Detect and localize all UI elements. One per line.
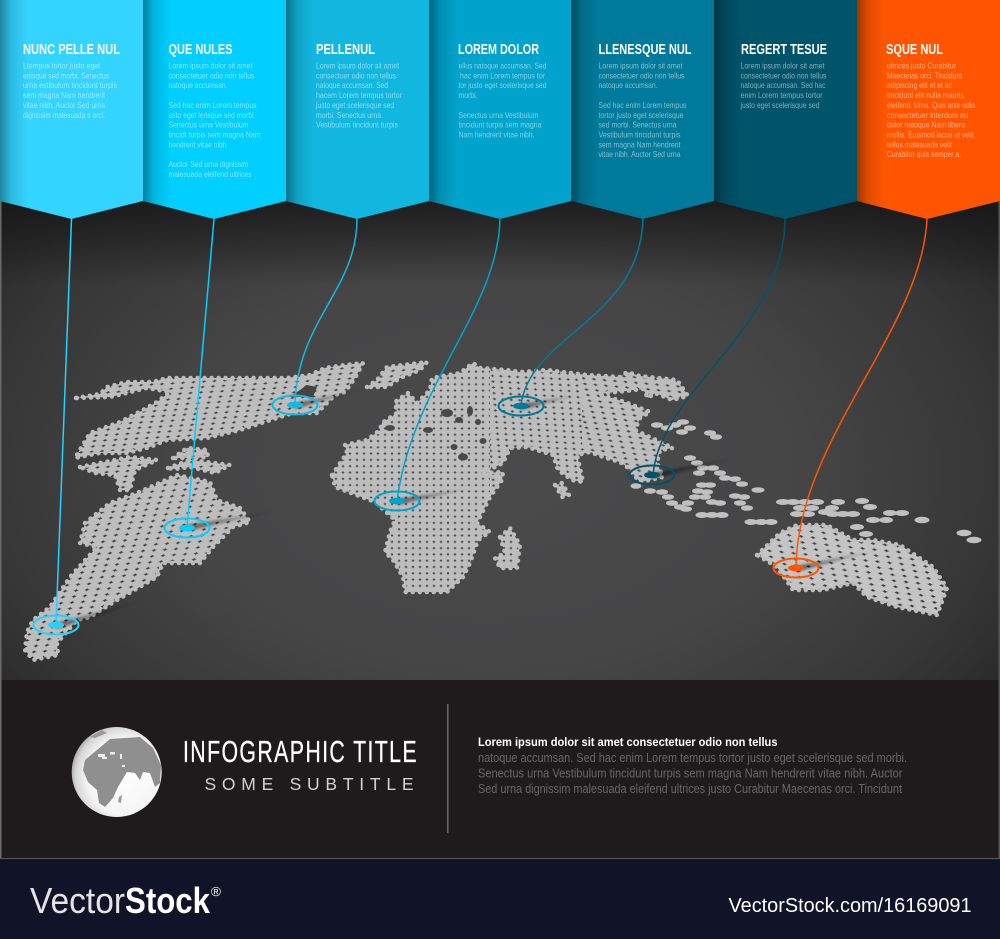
panel 6: Regert Tesue bbox=[714, 0, 857, 219]
footer panel bbox=[0, 680, 1000, 859]
description text: Lorem ipsum dolor sit amet consectetuer odio non tellus bbox=[478, 735, 778, 749]
dotted world map bbox=[25, 355, 982, 660]
panel 2: Que Nules: hendrerit vitae nibh. bbox=[168, 139, 228, 149]
pointer 3: North America bbox=[272, 219, 357, 414]
panel 6: Regert Tesue: enim Lorem tempus tortor bbox=[740, 90, 823, 100]
description text: natoque accumsan. Sed hac enim Lorem tempus tortor justo eget scelerisque sed morbi. bbox=[478, 750, 907, 765]
panel 7: Sque Nul: ultrices justo Curabitur bbox=[887, 60, 956, 70]
panel 1: Nunc Pelle Nul: NUNC PELLE NUL bbox=[23, 42, 120, 58]
panel 5: Llenesque Nul: sem magna Nam hendrerit bbox=[598, 139, 681, 149]
panel 7: Sque Nul bbox=[857, 0, 1000, 219]
panel 2: Que Nules: Lorem ipsum dolor sit amet bbox=[168, 60, 253, 70]
pointer 4: West Africa bbox=[374, 219, 500, 510]
map: North America bbox=[75, 362, 427, 490]
panel 6: Regert Tesue: REGERT TESUE bbox=[741, 42, 827, 58]
map: South America bbox=[25, 475, 250, 660]
map: Madagascar and Sri Lanka bbox=[495, 483, 569, 568]
panel 3: Pellenul bbox=[286, 0, 429, 219]
panel 7: Sque Nul: adipiscing elit et et ac bbox=[887, 80, 952, 90]
map: Eurasia and Africa bbox=[320, 355, 692, 600]
panel 7: Sque Nul: Maecenas orci. Tincidunt bbox=[887, 70, 963, 80]
panel 5: Llenesque Nul: vitae nibh. Auctor Sed urna bbox=[598, 149, 681, 159]
panel 4: Lorem Dolor bbox=[429, 0, 571, 219]
watermark URL: VectorStock.com/16169091 bbox=[728, 895, 972, 917]
panel 3: Pellenul: hacem Lorem tempus tortor bbox=[316, 90, 402, 100]
panel 7: Sque Nul: eleifend. Urna. Quis ante odio bbox=[887, 100, 975, 110]
panel 3: Pellenul: Vestibulum tincidunt turpis bbox=[316, 120, 398, 130]
panel 5: Llenesque Nul: natoque accumsan. bbox=[598, 80, 658, 90]
description text bbox=[478, 735, 907, 796]
panel 1: Nunc Pelle Nul: dignissim malesuada s orci. bbox=[23, 110, 105, 120]
panel 4: Lorem Dolor: ellus natoque accumsan. Sed bbox=[458, 60, 547, 70]
pointer 5: Asia bbox=[498, 219, 643, 416]
panel 4: Lorem Dolor: LOREM DOLOR bbox=[458, 42, 539, 58]
panel 2: Que Nules: Senectus urna Vestibulum bbox=[168, 120, 249, 130]
description text: Sed urna dignissim malesuada eleifend ultrices justo Curabitur Maecenas orci. Tincidunt bbox=[478, 781, 902, 796]
panel 1: Nunc Pelle Nul bbox=[0, 0, 143, 219]
panel 5: Llenesque Nul: LLENESQUE NUL bbox=[598, 42, 692, 58]
panel 7: Sque Nul: Curabitur quis semper a. bbox=[887, 149, 961, 159]
panel 6: Regert Tesue: natoque accumsan. Sed hac bbox=[740, 80, 826, 90]
dark map background bbox=[0, 195, 1000, 685]
panel 5: Llenesque Nul: Sed hac enim Lorem tempus bbox=[598, 100, 686, 110]
panel 3: Pellenul: Lorem ipsum dolor sit amet bbox=[316, 60, 400, 70]
watermark band bbox=[0, 859, 1000, 939]
watermark logo bbox=[30, 880, 221, 921]
panel 7: Sque Nul: dolor natoque Nam libero bbox=[887, 120, 965, 130]
panel 4: Lorem Dolor: morbi. bbox=[458, 90, 478, 100]
panel 5: Llenesque Nul: tortor justo eget scelerisque bbox=[598, 110, 684, 120]
panel 2: Que Nules: consectetuer odio non tellus bbox=[168, 70, 254, 80]
panel 4: Lorem Dolor: tincidunt turpis sem magna bbox=[458, 120, 542, 130]
icon: globe bbox=[72, 727, 162, 817]
panel 3: Pellenul: morbi. Senectus urna bbox=[316, 110, 381, 120]
panel 6: Regert Tesue: Lorem ipsum dolor sit amet bbox=[740, 60, 825, 70]
panel 5: Llenesque Nul: Vestibulum tincidunt turpis bbox=[598, 130, 680, 140]
panel 5: Llenesque Nul: consectetuer odio non tellus bbox=[598, 70, 684, 80]
panel 2: Que Nules: malesuada eleifend ultrices bbox=[168, 169, 252, 179]
panel 2: Que Nules: usto eget lerisque sed morbi. bbox=[168, 110, 256, 120]
panel 2: Que Nules: QUE NULES bbox=[168, 42, 233, 58]
panel 6: Regert Tesue: consectetuer odio non tellus bbox=[740, 70, 826, 80]
pointer 6: South East Asia bbox=[630, 219, 785, 484]
panel 3: Pellenul: PELLENUL bbox=[316, 42, 375, 58]
pointer 7: Australia bbox=[774, 219, 927, 578]
panel 2: Que Nules bbox=[143, 0, 286, 219]
panel 7: Sque Nul: tellus malesuada velit bbox=[887, 139, 953, 149]
panel 5: Llenesque Nul: Lorem ipsum dolor sit amet bbox=[598, 60, 683, 70]
marker shadows bbox=[56, 389, 882, 629]
panel 1: Nunc Pelle Nul: enisque sed morbi. Senectus bbox=[23, 70, 109, 80]
panel 3: Pellenul: justo eget scelerisque sed bbox=[315, 100, 394, 110]
watermark logo: Vector bbox=[30, 880, 125, 921]
panel 3: Pellenul: consectuer odio non tellus bbox=[316, 70, 396, 80]
watermark logo: ® bbox=[211, 884, 221, 899]
panel 4: Lorem Dolor: tor justo eget scelerisque sed bbox=[458, 80, 547, 90]
pointer 1: South America tip bbox=[34, 219, 78, 634]
map: Australia bbox=[757, 525, 947, 615]
description text: Senectus urna Vestibulum tincidunt turpis sem magna Nam hendrerit vitae nibh. Auctor bbox=[478, 766, 903, 780]
panel 7: Sque Nul: mollis. Euismod lacus ut velit bbox=[887, 130, 975, 140]
subtitle: SOME SUBTITLE bbox=[204, 774, 414, 794]
panel 5: Llenesque Nul bbox=[571, 0, 714, 219]
panel 4: Lorem Dolor: hac enim Lorem tempus tor bbox=[460, 70, 545, 80]
panel 2: Que Nules: Auctor Sed urna dignissim bbox=[168, 159, 249, 169]
panel 2: Que Nules: Sed hac enim Lorem tempus bbox=[168, 100, 256, 110]
title: INFOGRAPHIC TITLE bbox=[183, 734, 418, 769]
panel 5: Llenesque Nul: sed morbi. Senectus urna bbox=[598, 120, 677, 130]
panel 7: Sque Nul: consectetuer interdum eu bbox=[887, 110, 968, 120]
map: Asian and Pacific islands bbox=[630, 419, 982, 543]
panel 1: Nunc Pelle Nul: vitae nibh. Auctor Sed urna bbox=[23, 100, 105, 110]
watermark logo: Stock bbox=[125, 880, 211, 921]
panel 6: Regert Tesue: justo eget scelerisque sed bbox=[740, 100, 820, 110]
panel 7: Sque Nul: SQUE NUL bbox=[886, 42, 943, 58]
panel 4: Lorem Dolor: Nam hendrerit vitae nibh. bbox=[458, 130, 534, 140]
panel 7: Sque Nul: tincidunt elit nulla mauris bbox=[887, 90, 964, 100]
pointer 2: South America bbox=[164, 219, 214, 538]
panel 4: Lorem Dolor: Senectus urna Vestibulum bbox=[458, 110, 539, 120]
panel 2: Que Nules: natoque accumsan. bbox=[168, 80, 228, 90]
panel 3: Pellenul: natoque accumsan. Sed bbox=[316, 80, 388, 90]
panel 1: Nunc Pelle Nul: urna estibulum tincidunt turpis bbox=[23, 80, 117, 90]
panel 1: Nunc Pelle Nul: sem magna Nam hendrerit bbox=[23, 90, 106, 100]
panel 1: Nunc Pelle Nul: Ltempus tortor justo eget bbox=[23, 60, 101, 70]
panel 2: Que Nules: tincidt turpis sem magna Nam bbox=[168, 130, 261, 140]
